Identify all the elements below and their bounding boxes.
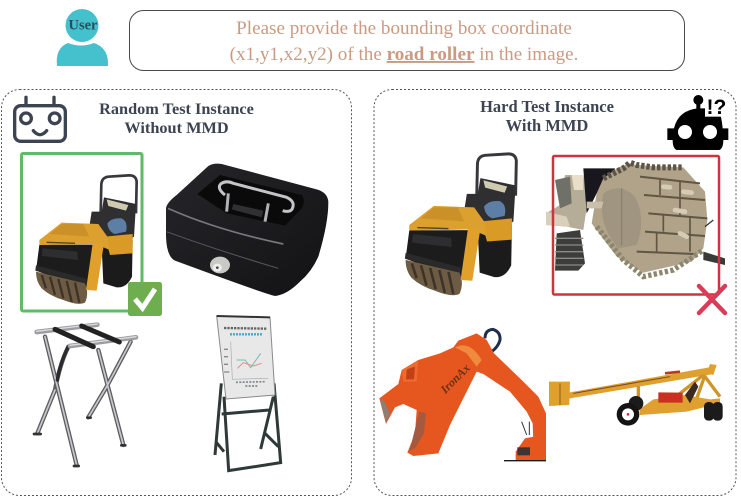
- prompt text box: Please provide the bounding box coordinate: [236, 18, 572, 39]
- icon: friendly robot: [15, 97, 65, 141]
- image: black cash box: [166, 164, 328, 296]
- icon: user: [57, 9, 108, 66]
- green bounding box: [22, 154, 142, 311]
- prompt text box: [130, 10, 684, 70]
- image: flip chart on easel: [215, 316, 281, 471]
- image: luggage rack: [34, 324, 136, 466]
- image: orange demolition arm: IronAx: [437, 361, 473, 397]
- icon: confused robot: [667, 95, 728, 150]
- image: road roller: [35, 175, 137, 304]
- panel: random test instance: [2, 90, 352, 496]
- image: road roller: [405, 154, 516, 295]
- image: trencher drum machine: [546, 163, 725, 277]
- panel: hard test instance: [374, 90, 736, 496]
- red bounding box: [553, 156, 719, 294]
- heading: random test instance without MMD: Without MMD: [124, 118, 229, 137]
- image: orange demolition arm: [379, 329, 546, 461]
- image: yellow boom lift: [549, 364, 723, 426]
- prompt text box: (x1,y1,x2,y2) of the road roller in the image.: [230, 44, 578, 65]
- icon: user: User: [68, 18, 98, 34]
- icon: red cross: [699, 286, 725, 313]
- icon: confused robot: !?: [706, 96, 726, 119]
- heading: random test instance without MMD: Random Test Instance: [99, 99, 254, 118]
- heading: hard test instance with MMD: Hard Test Instance: [480, 97, 614, 116]
- icon: green check: [128, 282, 162, 316]
- heading: hard test instance with MMD: With MMD: [506, 116, 588, 135]
